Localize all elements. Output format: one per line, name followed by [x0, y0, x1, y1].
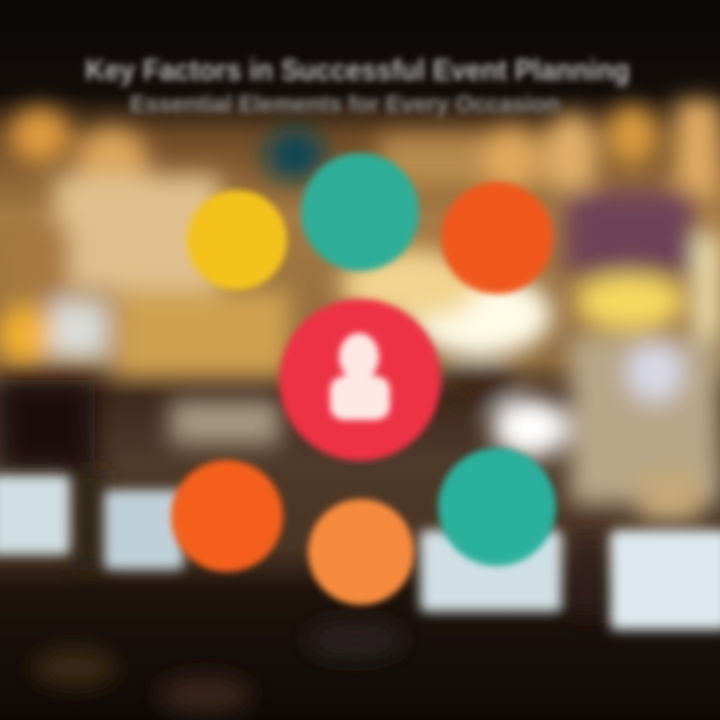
circle: light orange bottom — [308, 499, 414, 605]
circle: orange lower left — [171, 460, 283, 572]
circle: yellow — [187, 190, 287, 290]
dark middle band — [0, 380, 700, 615]
title — [85, 54, 630, 118]
circle: teal top — [301, 153, 419, 271]
warm lights and upper scene — [0, 100, 720, 505]
circle: orange top right — [441, 182, 553, 294]
circle: teal lower right — [438, 448, 556, 566]
title: Key Factors in Successful Event Planning — [85, 54, 630, 87]
title: Essential Elements for Every Occasion — [130, 91, 560, 118]
dark floor details — [33, 622, 405, 713]
circle: red centre with person icon — [279, 299, 441, 461]
bright lower panels — [0, 475, 720, 630]
icon: person — [330, 333, 390, 420]
